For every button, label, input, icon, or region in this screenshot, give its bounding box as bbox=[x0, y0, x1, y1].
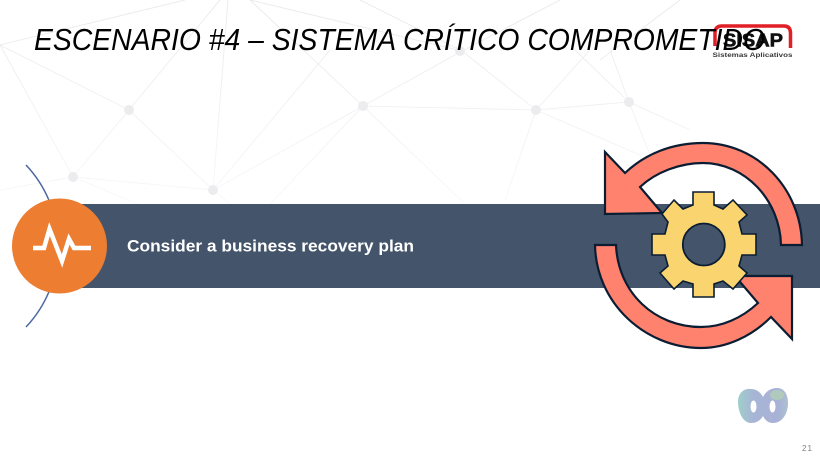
logo: SISAP bbox=[712, 26, 793, 59]
logo: SISAP: SISAP bbox=[723, 30, 783, 50]
logo: webex bbox=[738, 388, 788, 423]
logo: SISAP: Sistemas Aplicativos bbox=[712, 52, 793, 59]
banner bar bbox=[59, 204, 820, 288]
banner text: Consider a business recovery plan bbox=[127, 236, 414, 256]
arrow: bottom bbox=[595, 245, 792, 348]
page number: 21 bbox=[802, 444, 813, 453]
icon: orange circle with pulse bbox=[12, 198, 107, 294]
title: ESCENARIO #4 – SISTEMA CRÍTICO COMPROMETIDO bbox=[34, 22, 765, 57]
arrow: top bbox=[605, 143, 802, 245]
gear hole bbox=[683, 224, 725, 266]
decorative arc bbox=[26, 165, 58, 327]
icon: recovery gear with arrows bbox=[595, 143, 802, 348]
gear bbox=[652, 192, 756, 297]
